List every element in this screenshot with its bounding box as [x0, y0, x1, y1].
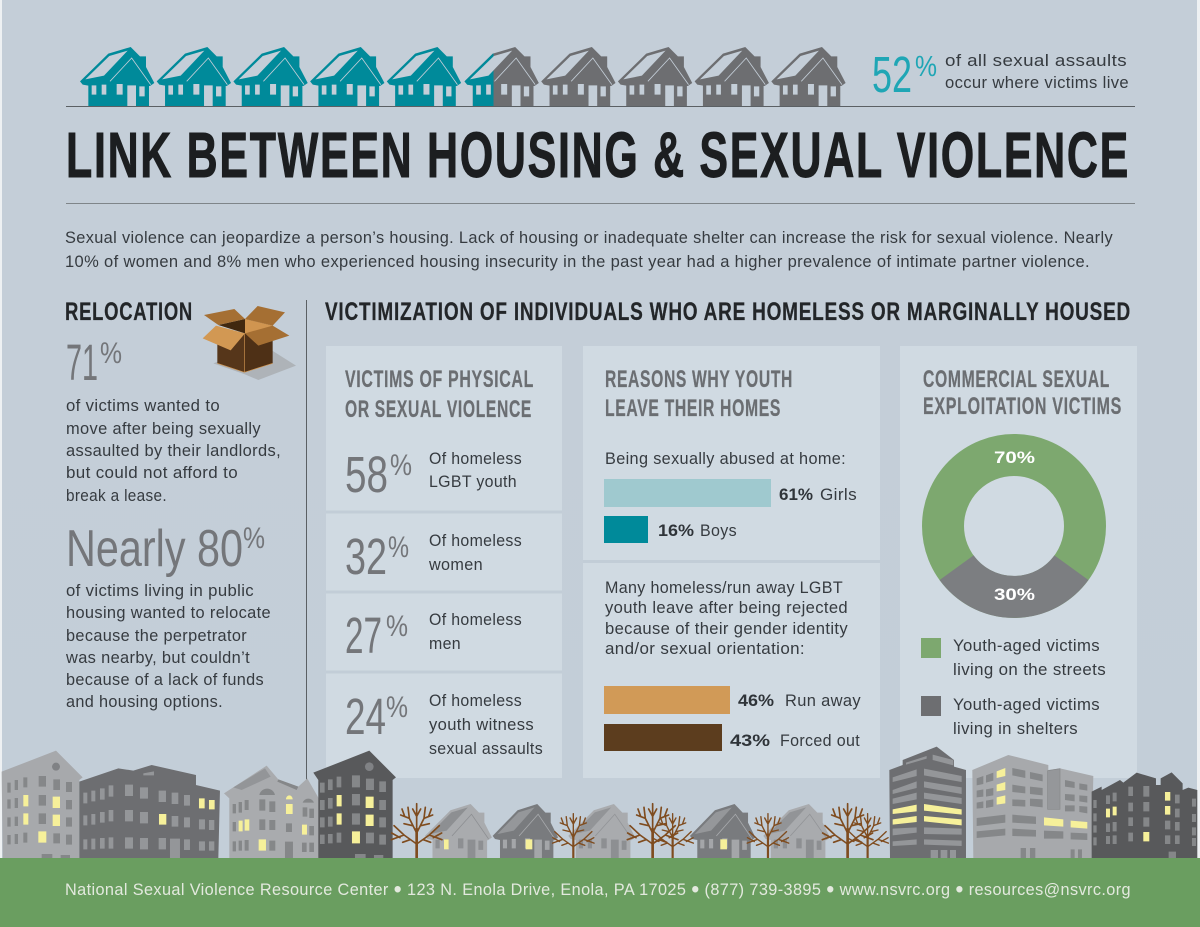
panel: reasons why youth leave their homes: youth leave after being rejected [605, 599, 848, 617]
rule [66, 106, 1135, 108]
stat: 71 percent relocation [66, 334, 281, 505]
stat: 71 percent relocation: but could not afford to [66, 464, 238, 482]
stat: 71 percent relocation: of victims wanted to [66, 397, 220, 415]
stat: 58 percent: 58 [345, 446, 388, 503]
office tower [889, 747, 966, 859]
legend: streets: living on the streets [953, 661, 1106, 679]
stat: 27 percent: men [429, 635, 461, 653]
stat: 24 percent: % [386, 691, 408, 724]
building 3 [224, 766, 322, 859]
stat: 71 percent relocation: move after being sexually [66, 420, 261, 438]
donut chart: 30% [994, 586, 1035, 604]
office block [972, 755, 1093, 859]
skyline: left buildings [2, 751, 396, 859]
house: light 1 [425, 804, 492, 859]
footer band: • [826, 876, 835, 903]
stat: 71 percent relocation: 71 [66, 334, 98, 391]
building 2 [79, 765, 220, 859]
footer band [0, 858, 1200, 927]
bar: forced out 43 percent: 43% [730, 732, 770, 750]
stat: 58 percent: % [390, 449, 412, 482]
bar: forced out 43 percent [604, 724, 860, 751]
stat: 32 percent: 32 [345, 528, 387, 585]
rule [66, 202, 1135, 204]
house: dark 1 [493, 804, 558, 859]
bar: run away 46 percent: 46% [738, 692, 774, 710]
stat: 32 percent [345, 528, 522, 585]
footer band: (877) 739-3895 [700, 880, 826, 899]
skyline: houses and trees [391, 804, 888, 859]
bar: boys 16 percent [604, 516, 737, 543]
footer band: • [691, 876, 700, 903]
panel: reasons why youth leave their homes: LEAVE THEIR HOMES [605, 395, 781, 422]
legend: streets [921, 637, 1106, 679]
building 1 [2, 751, 83, 859]
panel: commercial sexual exploitation victims [900, 346, 1137, 778]
panel: victims of physical or sexual violence [326, 346, 562, 778]
panel: reasons why youth leave their homes: Being sexually abused at home: [605, 450, 846, 468]
bar: forced out 43 percent: Forced out [780, 732, 860, 750]
footer band: • [955, 876, 964, 903]
stat: nearly 80 percent: was nearby, but couldn’t [65, 649, 250, 667]
house: light 3 [763, 804, 830, 859]
stat: 27 percent: 27 [345, 607, 382, 664]
stat: 52 percent: of all sexual assaults [945, 52, 1127, 70]
stat: nearly 80 percent: because of a lack of funds [66, 671, 264, 689]
stat: nearly 80 percent [65, 520, 271, 711]
stat: 27 percent [345, 607, 522, 664]
stat: nearly 80 percent: because the perpetrator [66, 627, 247, 645]
legend: streets: Youth-aged victims [953, 637, 1100, 655]
legend: shelters: living in shelters [953, 720, 1078, 738]
bar: boys 16 percent: 16% [658, 522, 694, 540]
bar: run away 46 percent: Run away [785, 692, 861, 710]
building 4 [313, 751, 396, 859]
house: light 2 [568, 804, 635, 859]
stat: nearly 80 percent: of victims living in public [66, 582, 254, 600]
trees [391, 804, 888, 859]
panel: reasons why youth leave their homes: because of their gender identity [605, 620, 848, 638]
legend: shelters [921, 696, 1100, 738]
footer band: National Sexual Violence Resource Center [65, 880, 403, 899]
stat: 52 percent: occur where victims live [945, 74, 1129, 92]
stat: 52 percent: 52 [872, 46, 912, 103]
stat: 32 percent: Of homeless [429, 532, 522, 550]
stat: nearly 80 percent: % [243, 522, 265, 555]
skyline: right buildings [889, 747, 1197, 859]
stat: 24 percent [345, 688, 543, 758]
bar: girls 61 percent [604, 479, 857, 507]
house: dark 2 [690, 804, 755, 859]
top row of houses: 52% indicator [80, 47, 846, 106]
panel: reasons why youth leave their homes [583, 346, 880, 778]
footer band: • [394, 876, 402, 903]
panel: victims of physical or sexual violence: OR SEXUAL VIOLENCE [345, 396, 532, 423]
legend: shelters: Youth-aged victims [953, 696, 1100, 714]
stat: 52 percent: % [915, 51, 937, 83]
donut chart [943, 449, 1085, 604]
stat: 71 percent relocation: assaulted by their landlords, [66, 442, 281, 460]
footer band: 123 N. Enola Drive, Enola, PA 17025 [402, 880, 691, 899]
icon: cardboard box [203, 306, 296, 380]
stat: 71 percent relocation: break a lease. [66, 487, 167, 505]
stat: 32 percent: women [428, 556, 483, 574]
stat: nearly 80 percent: and housing options. [66, 693, 223, 711]
bar: boys 16 percent: Boys [700, 522, 737, 540]
bar: girls 61 percent: Girls [820, 486, 857, 504]
stat: 58 percent: Of homeless [429, 450, 522, 468]
panel: reasons why youth leave their homes: and/or sexual orientation: [605, 640, 805, 658]
footer band: www.nsvrc.org [835, 880, 955, 899]
stat: 32 percent: % [388, 531, 409, 564]
intro text: 10% of women and 8% men who experienced housing insecurity in the past year had a higher prevalence of intimate partner violence. [65, 253, 1090, 271]
bar: run away 46 percent [604, 686, 861, 714]
panel: reasons why youth leave their homes: Many homeless/run away LGBT [605, 579, 843, 597]
stat: 58 percent [345, 446, 522, 503]
stat: 24 percent: sexual assaults [429, 740, 543, 758]
panel: reasons why youth leave their homes: REASONS WHY YOUTH [605, 366, 793, 393]
bar: girls 61 percent: 61% [779, 486, 813, 504]
intro text [65, 229, 1113, 271]
stat: 24 percent: 24 [345, 688, 386, 745]
stat: 58 percent: LGBT youth [429, 473, 517, 491]
stat: 27 percent: % [386, 610, 408, 643]
vertical divider [306, 300, 308, 782]
donut chart: 70% [994, 449, 1035, 467]
stat: 71 percent relocation: % [100, 337, 122, 370]
stat: nearly 80 percent: Nearly 80 [66, 520, 243, 578]
stat: 24 percent: youth witness [429, 716, 534, 734]
stat: 27 percent: Of homeless [429, 611, 522, 629]
intro text: Sexual violence can jeopardize a person’s housing. Lack of housing or inadequate shelter can increase the risk for sexual violence. Nearly [65, 229, 1113, 247]
stat: nearly 80 percent: housing wanted to relocate [66, 604, 271, 622]
heading: relocation: RELOCATION [65, 298, 193, 326]
footer band: resources@nsvrc.org [964, 880, 1131, 899]
stat: 24 percent: Of homeless [429, 692, 522, 710]
stat: 52 percent [872, 46, 1129, 103]
castle-style building [1092, 772, 1197, 859]
panel: victims of physical or sexual violence: VICTIMS OF PHYSICAL [345, 366, 534, 393]
